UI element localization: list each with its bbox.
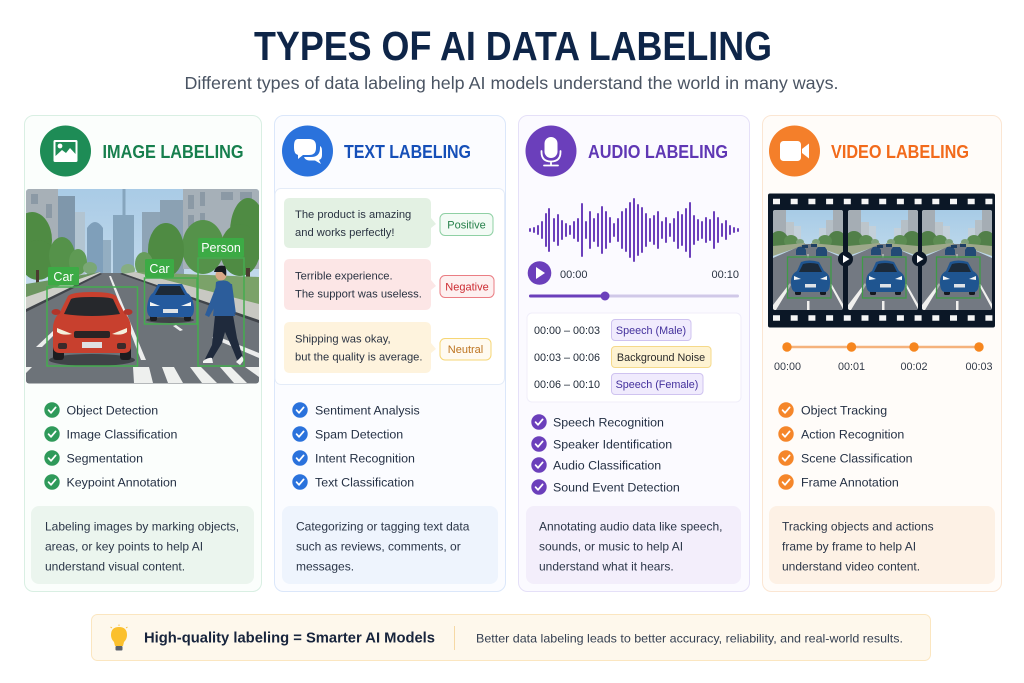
film strip [768,194,995,328]
checklist: audio: Speech Recognition [553,416,664,430]
tag: negative [440,276,494,298]
label: person [198,238,244,257]
timeline: 00:02 [900,361,928,373]
checklist: video [778,402,913,490]
icon: video camera [769,126,820,176]
progress slider [529,292,739,300]
bounding boxes [47,258,244,366]
description: video: frame by frame to help AI [782,540,916,554]
blue car [146,284,194,323]
callout headline: High-quality labeling = Smarter AI Models [144,630,435,646]
audio segments table: 00:06 – 00:10 [534,379,600,391]
heading: video labeling: VIDEO LABELING [831,141,969,162]
checklist: image [44,402,177,490]
label: car: Car [149,262,170,276]
panel: audio labeling [518,116,750,592]
bubble: neutral: Shipping was okay, [295,334,391,346]
tag: speech female: Speech (Female) [616,379,698,391]
play marker [838,252,853,266]
description: text [282,506,498,584]
tag: positive: Positive [447,220,486,232]
tag: neutral: Neutral [448,344,483,356]
checklist: audio: Sound Event Detection [553,480,680,494]
tag: negative: Negative [445,282,489,294]
panel: text labeling [274,116,506,592]
checklist: text: Spam Detection [315,428,403,442]
checklist: text: Sentiment Analysis [315,404,420,418]
timeline [774,342,993,373]
checklist: image: Keypoint Annotation [66,476,177,490]
checklist: text [292,402,420,490]
callout text: Better data labeling leads to better accuracy, reliability, and real-world results. [476,632,903,646]
play button [528,261,551,285]
sentiment examples panel [275,188,504,384]
checklist: audio [531,414,680,495]
bubble: negative: Terrible experience. [295,270,393,282]
frame 1 [770,210,846,310]
bubble: negative [284,259,436,310]
description: audio: sounds, or music to help AI [539,540,683,554]
description: video: Tracking objects and actions [782,520,934,534]
description: video: understand video content. [782,560,920,574]
bubble: positive: The product is amazing [295,209,411,221]
timeline: 00:01 [838,361,865,373]
checklist: video: Scene Classification [801,452,913,466]
tag: speech male [612,320,691,340]
street scene with bounding boxes [12,189,266,384]
checklist: image: Object Detection [66,404,158,418]
checklist: video: Action Recognition [801,428,904,442]
frame 3 [919,210,995,310]
checklist: text: Text Classification [315,476,414,490]
heading: image labeling: IMAGE LABELING [102,141,244,162]
description: image [31,506,254,584]
heading: audio labeling: AUDIO LABELING [588,141,728,162]
checklist: image: Segmentation [66,452,143,466]
bubble: positive [284,198,436,248]
tag: background noise [612,346,711,368]
icon: chat bubbles [282,126,333,176]
audio segments table: 00:00 – 00:03 [534,325,600,337]
red car [49,292,135,366]
description: image: Labeling images by marking objects, [45,520,239,534]
bubble: neutral [284,322,436,373]
frame 2 [845,210,921,310]
waveform [530,199,738,261]
description: text: messages. [296,560,354,574]
subtitle: Different types of data labeling help AI models understand the world in many ways. [184,73,838,93]
checklist: audio: Speaker Identification [553,438,672,452]
description: video [769,506,995,584]
tag: positive [440,214,493,236]
label: car: Car [53,270,74,284]
label: car [145,259,174,278]
checklist: audio: Audio Classification [553,458,661,472]
audio segments table [527,313,741,402]
audio start time: 00:00 [560,269,588,281]
bubble: positive: and works perfectly! [295,227,394,239]
tag: speech female [612,374,703,394]
tag: neutral [440,338,491,360]
checklist: video: Object Tracking [801,404,887,418]
checklist: video: Frame Annotation [801,476,899,490]
description: image: areas, or key points to help AI [45,540,203,554]
icon: microphone [526,126,576,176]
label: car [48,267,79,286]
description: text: such as reviews, comments, or [296,540,461,554]
checklist: text: Intent Recognition [315,452,415,466]
checklist: image: Image Classification [66,428,177,442]
bubble: negative: The support was useless. [295,288,422,300]
person [203,266,244,365]
description: audio: Annotating audio data like speech, [539,520,722,534]
panel: image labeling [12,116,266,592]
audio end time: 00:10 [711,269,739,281]
panel: video labeling [762,116,1002,592]
timeline: 00:00 [774,361,801,373]
icon: image [40,126,91,176]
tag: speech male: Speech (Male) [616,325,686,337]
label: person: Person [201,241,241,255]
description: image: understand visual content. [45,560,185,574]
tag: background noise: Background Noise [617,352,705,364]
description: audio [526,506,741,584]
play marker [912,252,927,266]
timeline: 00:03 [965,361,993,373]
heading: text labeling: TEXT LABELING [344,141,471,162]
callout: quality footer [92,614,930,660]
description: text: Categorizing or tagging text data [296,520,470,534]
title: TYPES OF AI DATA LABELING [254,23,772,69]
icon: light bulb [110,624,128,650]
audio segments table: 00:03 – 00:06 [534,352,600,364]
description: audio: understand what it hears. [539,560,674,574]
bubble: neutral: but the quality is average. [295,352,422,364]
